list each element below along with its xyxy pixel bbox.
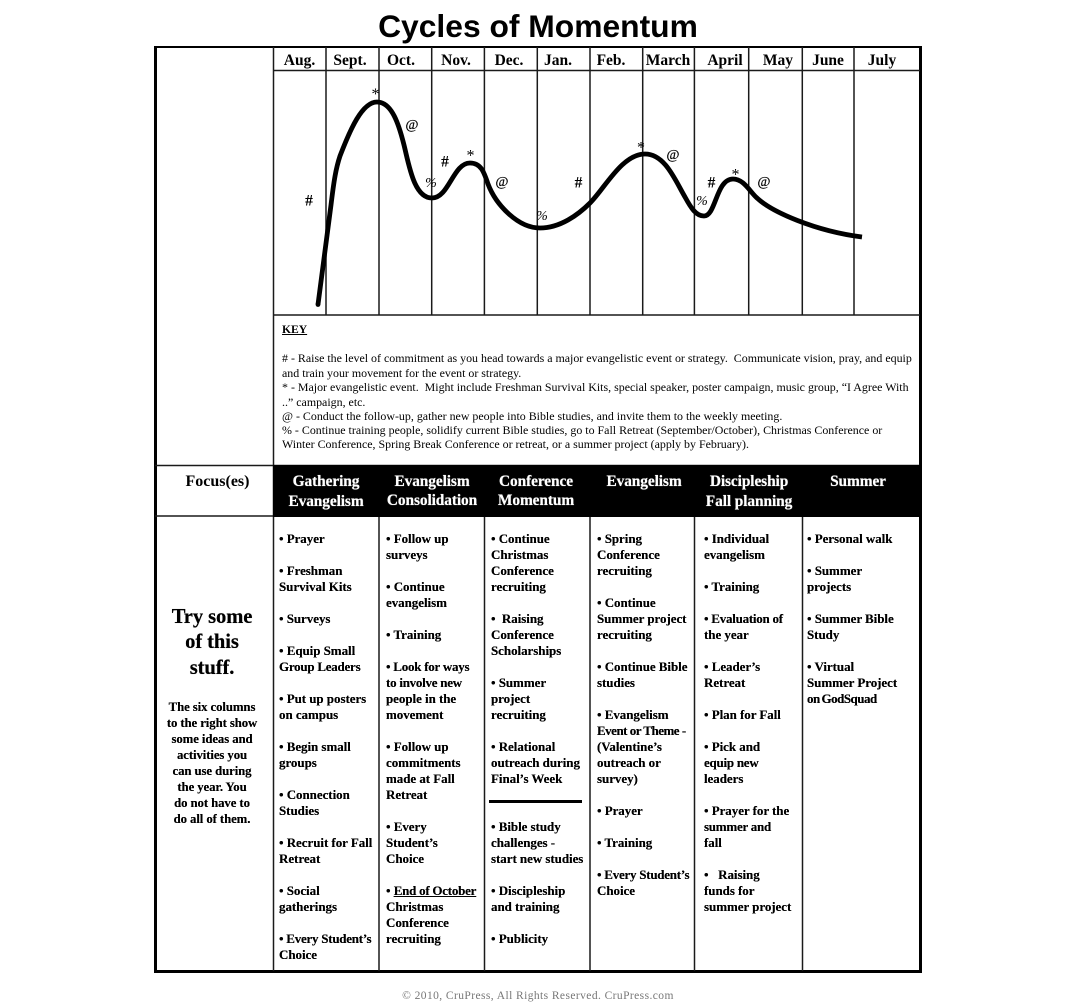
column 3: activities: Conference bbox=[491, 563, 554, 578]
focus: evangelism consolidation: Consolidation bbox=[387, 492, 477, 509]
month header row: Nov. bbox=[441, 52, 471, 69]
focus: gathering evangelism: Evangelism bbox=[288, 492, 364, 510]
focus band bbox=[273, 465, 922, 517]
curve markers: @ bbox=[667, 148, 680, 163]
column 1: activities: Choice bbox=[279, 947, 317, 962]
column 5: activities: • Prayer for the bbox=[704, 803, 789, 818]
column 3: activities: challenges - bbox=[491, 835, 555, 850]
column 1: activities: gatherings bbox=[279, 899, 337, 914]
column 4: activities: • Training bbox=[597, 835, 652, 850]
focus: conference momentum: Conference bbox=[499, 472, 573, 490]
column 4: activities: Event or Theme - bbox=[597, 723, 686, 738]
column 1: activities: • Put up posters bbox=[279, 691, 366, 706]
column 4: activities: Choice bbox=[597, 883, 635, 898]
column 4: activities bbox=[597, 531, 690, 898]
column 3 divider rule bbox=[488, 800, 582, 803]
month header row: May bbox=[763, 52, 793, 69]
month header row: Aug. bbox=[284, 52, 315, 69]
callout text: do not have to bbox=[174, 796, 250, 810]
column 3: activities: Conference bbox=[491, 627, 554, 642]
callout text: to the right show bbox=[167, 716, 257, 730]
curve markers: % bbox=[425, 176, 437, 191]
curve markers: % bbox=[536, 209, 548, 224]
callout heading: Try some bbox=[172, 606, 252, 628]
column 3: activities: Final’s Week bbox=[491, 771, 562, 786]
column 2: activities: Conference bbox=[386, 915, 449, 930]
callout text: can use during bbox=[173, 764, 251, 778]
column 3: activities: • Summer bbox=[491, 675, 546, 690]
month header row: Feb. bbox=[597, 52, 625, 69]
column 1: activities bbox=[279, 531, 372, 962]
column 5: activities: • Evaluation of bbox=[704, 611, 783, 626]
column 1: activities: • Begin small bbox=[279, 739, 351, 754]
column 2: activities: movement bbox=[386, 707, 443, 722]
month header row bbox=[284, 52, 896, 69]
column 1: activities: groups bbox=[279, 755, 317, 770]
curve markers: * bbox=[372, 86, 380, 103]
column 6: activities: • Summer Bible bbox=[807, 611, 894, 626]
curve markers: % bbox=[696, 194, 708, 209]
column 2: activities: • Every bbox=[386, 819, 427, 834]
month header row: Jan. bbox=[544, 52, 572, 69]
focus: gathering evangelism: Gathering bbox=[293, 473, 359, 490]
column 6: activities: Summer Project bbox=[807, 675, 897, 690]
column 2: activities: • Continue bbox=[386, 579, 445, 594]
month header row: March bbox=[646, 52, 690, 69]
key text: and train your movement for the event or strategy. bbox=[282, 366, 521, 380]
column 1: activities: • Equip Small bbox=[279, 643, 355, 658]
callout text: some ideas and bbox=[171, 732, 253, 746]
column 5: activities: funds for bbox=[704, 883, 754, 898]
curve markers: * bbox=[466, 148, 474, 164]
column 6: activities: • Summer bbox=[807, 563, 862, 578]
column 4: activities: • Every Student’s bbox=[597, 867, 689, 882]
footer: © 2010, CruPress, All Rights Reserved. CruPress.com bbox=[402, 990, 674, 1002]
focus: discipleship fall planning bbox=[706, 473, 793, 510]
key text: @ - Conduct the follow-up, gather new people into Bible studies, and invite them to the weekly meeting. bbox=[282, 409, 782, 423]
column 6: activities: • Personal walk bbox=[807, 531, 892, 546]
momentum curve bbox=[318, 102, 862, 304]
column 1: activities: • Every Student’s bbox=[279, 931, 371, 946]
column 1: activities: • Recruit for Fall bbox=[279, 835, 372, 850]
key text: Winter Conference, Spring Break Conference or retreat, or a summer project (apply by February). bbox=[282, 437, 749, 451]
column 5: activities: equip new bbox=[704, 755, 758, 770]
column 4: activities: studies bbox=[597, 675, 635, 690]
curve markers bbox=[305, 86, 771, 224]
focus: conference momentum: Momentum bbox=[498, 492, 574, 509]
column 5: activities: • Plan for Fall bbox=[704, 707, 781, 722]
column 3: activities: project bbox=[491, 691, 530, 706]
column 4: activities: outreach or bbox=[597, 755, 661, 770]
column 1: activities: • Connection bbox=[279, 787, 350, 802]
focus: discipleship fall planning: Discipleship bbox=[710, 473, 788, 490]
callout heading bbox=[172, 606, 252, 678]
column 5: activities: leaders bbox=[704, 771, 743, 786]
column 4: activities: recruiting bbox=[597, 563, 652, 578]
column 5: activities: Retreat bbox=[704, 675, 745, 690]
column 3: activities: start new studies bbox=[491, 851, 583, 866]
column 4: activities: • Continue Bible bbox=[597, 659, 687, 674]
column 2: activities: • Follow up bbox=[386, 531, 449, 546]
column 1: activities: • Prayer bbox=[279, 531, 325, 546]
column 5: activities: fall bbox=[704, 835, 722, 850]
curve markers: @ bbox=[496, 175, 509, 190]
curve markers: * bbox=[637, 140, 645, 156]
column 5: activities bbox=[704, 531, 792, 914]
table frame bbox=[154, 46, 922, 973]
column 4: activities: survey) bbox=[597, 771, 638, 786]
column 3: activities: Scholarships bbox=[491, 643, 561, 658]
column 2: activities: • Follow up bbox=[386, 739, 449, 754]
column 2: activities: to involve new bbox=[386, 675, 462, 690]
callout heading: of this bbox=[185, 631, 239, 653]
callout text: the year. You bbox=[177, 780, 247, 794]
curve markers: * bbox=[732, 166, 740, 184]
title: Cycles of Momentum bbox=[378, 8, 698, 44]
column 2: activities: evangelism bbox=[386, 595, 447, 610]
focus: evangelism: Evangelism bbox=[606, 473, 682, 490]
column 2: activities: made at Fall bbox=[386, 771, 455, 786]
column 5: activities: • Pick and bbox=[704, 739, 760, 754]
column 4: activities: • Evangelism bbox=[597, 707, 668, 722]
column 4: activities: (Valentine’s bbox=[597, 739, 662, 754]
column 3: activities: • Continue bbox=[491, 531, 550, 546]
column 3: activities: • Bible study bbox=[491, 819, 561, 834]
column 3: activities: • Discipleship bbox=[491, 883, 565, 898]
callout text: do all of them. bbox=[174, 812, 250, 826]
curve markers: @ bbox=[758, 175, 771, 190]
column 2: activities: Choice bbox=[386, 851, 424, 866]
column 1: activities: • Social bbox=[279, 883, 320, 898]
column 5: activities: summer and bbox=[704, 819, 771, 834]
key heading: KEY bbox=[282, 323, 307, 336]
column 4: activities: • Prayer bbox=[597, 803, 643, 818]
key text: * - Major evangelistic event. Might include Freshman Survival Kits, special speaker, poster campaign, music group, “I Agree With bbox=[282, 380, 909, 394]
column 4: activities: Summer project bbox=[597, 611, 686, 626]
focus: summer: Summer bbox=[830, 473, 886, 490]
focus: gathering evangelism bbox=[288, 473, 364, 510]
column 3: activities: outreach during bbox=[491, 755, 580, 770]
column 6: activities: on GodSquad bbox=[807, 691, 877, 706]
focus: conference momentum bbox=[498, 472, 574, 509]
focus: evangelism consolidation: Evangelism bbox=[394, 472, 470, 490]
callout text: The six columns bbox=[169, 700, 255, 714]
column 2: activities: surveys bbox=[386, 547, 428, 562]
month header row: July bbox=[868, 52, 896, 69]
column 2: activities: Retreat bbox=[386, 787, 427, 802]
column 1: activities: Retreat bbox=[279, 851, 320, 866]
column 1: activities: Survival Kits bbox=[279, 579, 352, 594]
column 2: activities: commitments bbox=[386, 755, 461, 770]
column 3: activities: recruiting bbox=[491, 579, 546, 594]
column 5: activities: summer project bbox=[704, 899, 791, 914]
column 4: activities: • Spring bbox=[597, 531, 642, 546]
callout heading: stuff. bbox=[190, 656, 234, 678]
focus: discipleship fall planning: Fall planning bbox=[706, 492, 792, 510]
column 6: activities bbox=[807, 531, 898, 706]
key text: # - Raise the level of commitment as you head towards a major evangelistic event or strategy. Communicate vision, pray, and equip bbox=[282, 351, 912, 365]
curve markers: # bbox=[575, 174, 583, 192]
curve start cap bbox=[316, 302, 320, 307]
column 2: activities: people in the bbox=[386, 691, 456, 706]
key text: % - Continue training people, solidify current Bible studies, go to Fall Retreat (September/October), Christmas Conference or bbox=[282, 423, 882, 437]
key text bbox=[282, 351, 912, 451]
column 1: activities: Studies bbox=[279, 803, 319, 818]
month header row: June bbox=[812, 52, 844, 69]
column 3: activities: Christmas bbox=[491, 547, 548, 562]
column 2: activities: • End of October bbox=[386, 883, 476, 898]
column 5: activities: • Leader’s bbox=[704, 659, 760, 674]
column 5: activities: • Training bbox=[704, 579, 759, 594]
chart: momentum curve with markers bbox=[305, 86, 862, 307]
month header row: Sept. bbox=[333, 52, 367, 69]
column 3: activities: and training bbox=[491, 899, 559, 914]
column 5: activities: evangelism bbox=[704, 547, 765, 562]
column 1: activities: • Freshman bbox=[279, 563, 342, 578]
focus label: Focus(es) bbox=[186, 473, 249, 490]
left callout bbox=[167, 606, 258, 826]
month header row: Dec. bbox=[495, 52, 523, 69]
column 1: activities: • Surveys bbox=[279, 611, 330, 626]
column 2: activities: • Look for ways bbox=[386, 659, 469, 674]
column 3: activities: • Relational bbox=[491, 739, 555, 754]
column 5: activities: • Raising bbox=[704, 867, 760, 882]
column 5: activities: • Individual bbox=[704, 531, 769, 546]
column 5: activities: the year bbox=[704, 627, 749, 642]
column 4: activities: Conference bbox=[597, 547, 660, 562]
column 2: activities bbox=[386, 531, 476, 946]
curve markers: # bbox=[441, 154, 449, 170]
column 6: activities: • Virtual bbox=[807, 659, 854, 674]
column 2: activities: Student’s bbox=[386, 835, 438, 850]
month header row: Oct. bbox=[387, 52, 415, 69]
column 6: activities: Study bbox=[807, 627, 839, 642]
column 3: activities: • Publicity bbox=[491, 931, 548, 946]
column 2: activities: • Training bbox=[386, 627, 441, 642]
callout text bbox=[167, 700, 258, 826]
column 1: activities: Group Leaders bbox=[279, 659, 360, 674]
column 3: activities bbox=[491, 531, 583, 946]
curve markers: # bbox=[305, 192, 313, 210]
column 4: activities: • Continue bbox=[597, 595, 656, 610]
column 1: activities: on campus bbox=[279, 707, 338, 722]
month header row: April bbox=[707, 52, 743, 69]
column 2: activities: Christmas bbox=[386, 899, 443, 914]
curve markers: # bbox=[708, 174, 716, 192]
focus: evangelism consolidation bbox=[387, 472, 478, 509]
column 6: activities: projects bbox=[807, 579, 851, 594]
curve markers: @ bbox=[406, 118, 419, 133]
column 3: activities: recruiting bbox=[491, 707, 546, 722]
key panel bbox=[282, 323, 912, 451]
key text: ..” campaign, etc. bbox=[282, 394, 365, 408]
column 2: activities: recruiting bbox=[386, 931, 441, 946]
callout text: activities you bbox=[177, 748, 247, 762]
column 3: activities: • Raising bbox=[491, 611, 543, 626]
column 4: activities: recruiting bbox=[597, 627, 652, 642]
